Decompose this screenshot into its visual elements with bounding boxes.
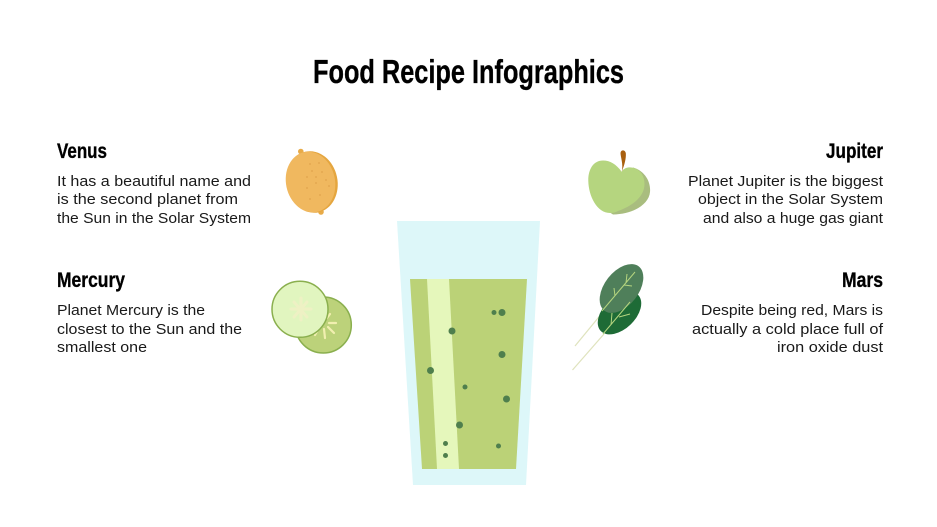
panel: Jupiter	[688, 140, 883, 227]
icon: spinach leaves	[572, 256, 652, 370]
juice seeds	[427, 309, 510, 458]
text block: Mercury	[57, 303, 242, 356]
icon: cucumber slices	[272, 281, 351, 353]
panel: Venus	[57, 140, 251, 227]
heading: Mars: Mars	[842, 269, 883, 292]
text block: Jupiter: object in the Solar System	[698, 192, 883, 208]
text block: Mars: iron oxide dust	[777, 340, 883, 356]
text block: Mars: actually a cold place full of	[692, 322, 884, 338]
juice	[410, 279, 527, 469]
text block: Jupiter: and also a huge gas giant	[703, 211, 883, 227]
heading: Jupiter: Jupiter	[826, 140, 883, 163]
text block: Jupiter: Planet Jupiter is the biggest	[688, 174, 883, 190]
text block: Venus	[57, 174, 251, 227]
glass of green juice	[397, 221, 540, 485]
panel: Mercury	[57, 269, 242, 356]
text block: Venus: the Sun in the Solar System	[57, 211, 251, 227]
text block: Mars: Despite being red, Mars is	[701, 303, 883, 319]
text block: Mercury: Planet Mercury is the	[57, 303, 205, 319]
text block: Mercury: closest to the Sun and the	[57, 322, 242, 338]
text block: Venus: It has a beautiful name and	[57, 174, 251, 190]
icon: apple	[588, 150, 650, 214]
heading: Venus: Venus	[57, 140, 107, 163]
glass	[397, 221, 540, 485]
title: Food Recipe Infographics	[313, 53, 624, 90]
heading: Mercury: Mercury	[57, 269, 125, 292]
icon: lemon	[280, 146, 343, 218]
juice highlight	[427, 279, 459, 469]
text block: Venus: is the second planet from	[57, 192, 238, 208]
text block: Mars	[692, 303, 884, 356]
text block: Jupiter	[688, 174, 883, 227]
panel: Mars	[692, 269, 884, 356]
text block: Mercury: smallest one	[57, 340, 147, 356]
